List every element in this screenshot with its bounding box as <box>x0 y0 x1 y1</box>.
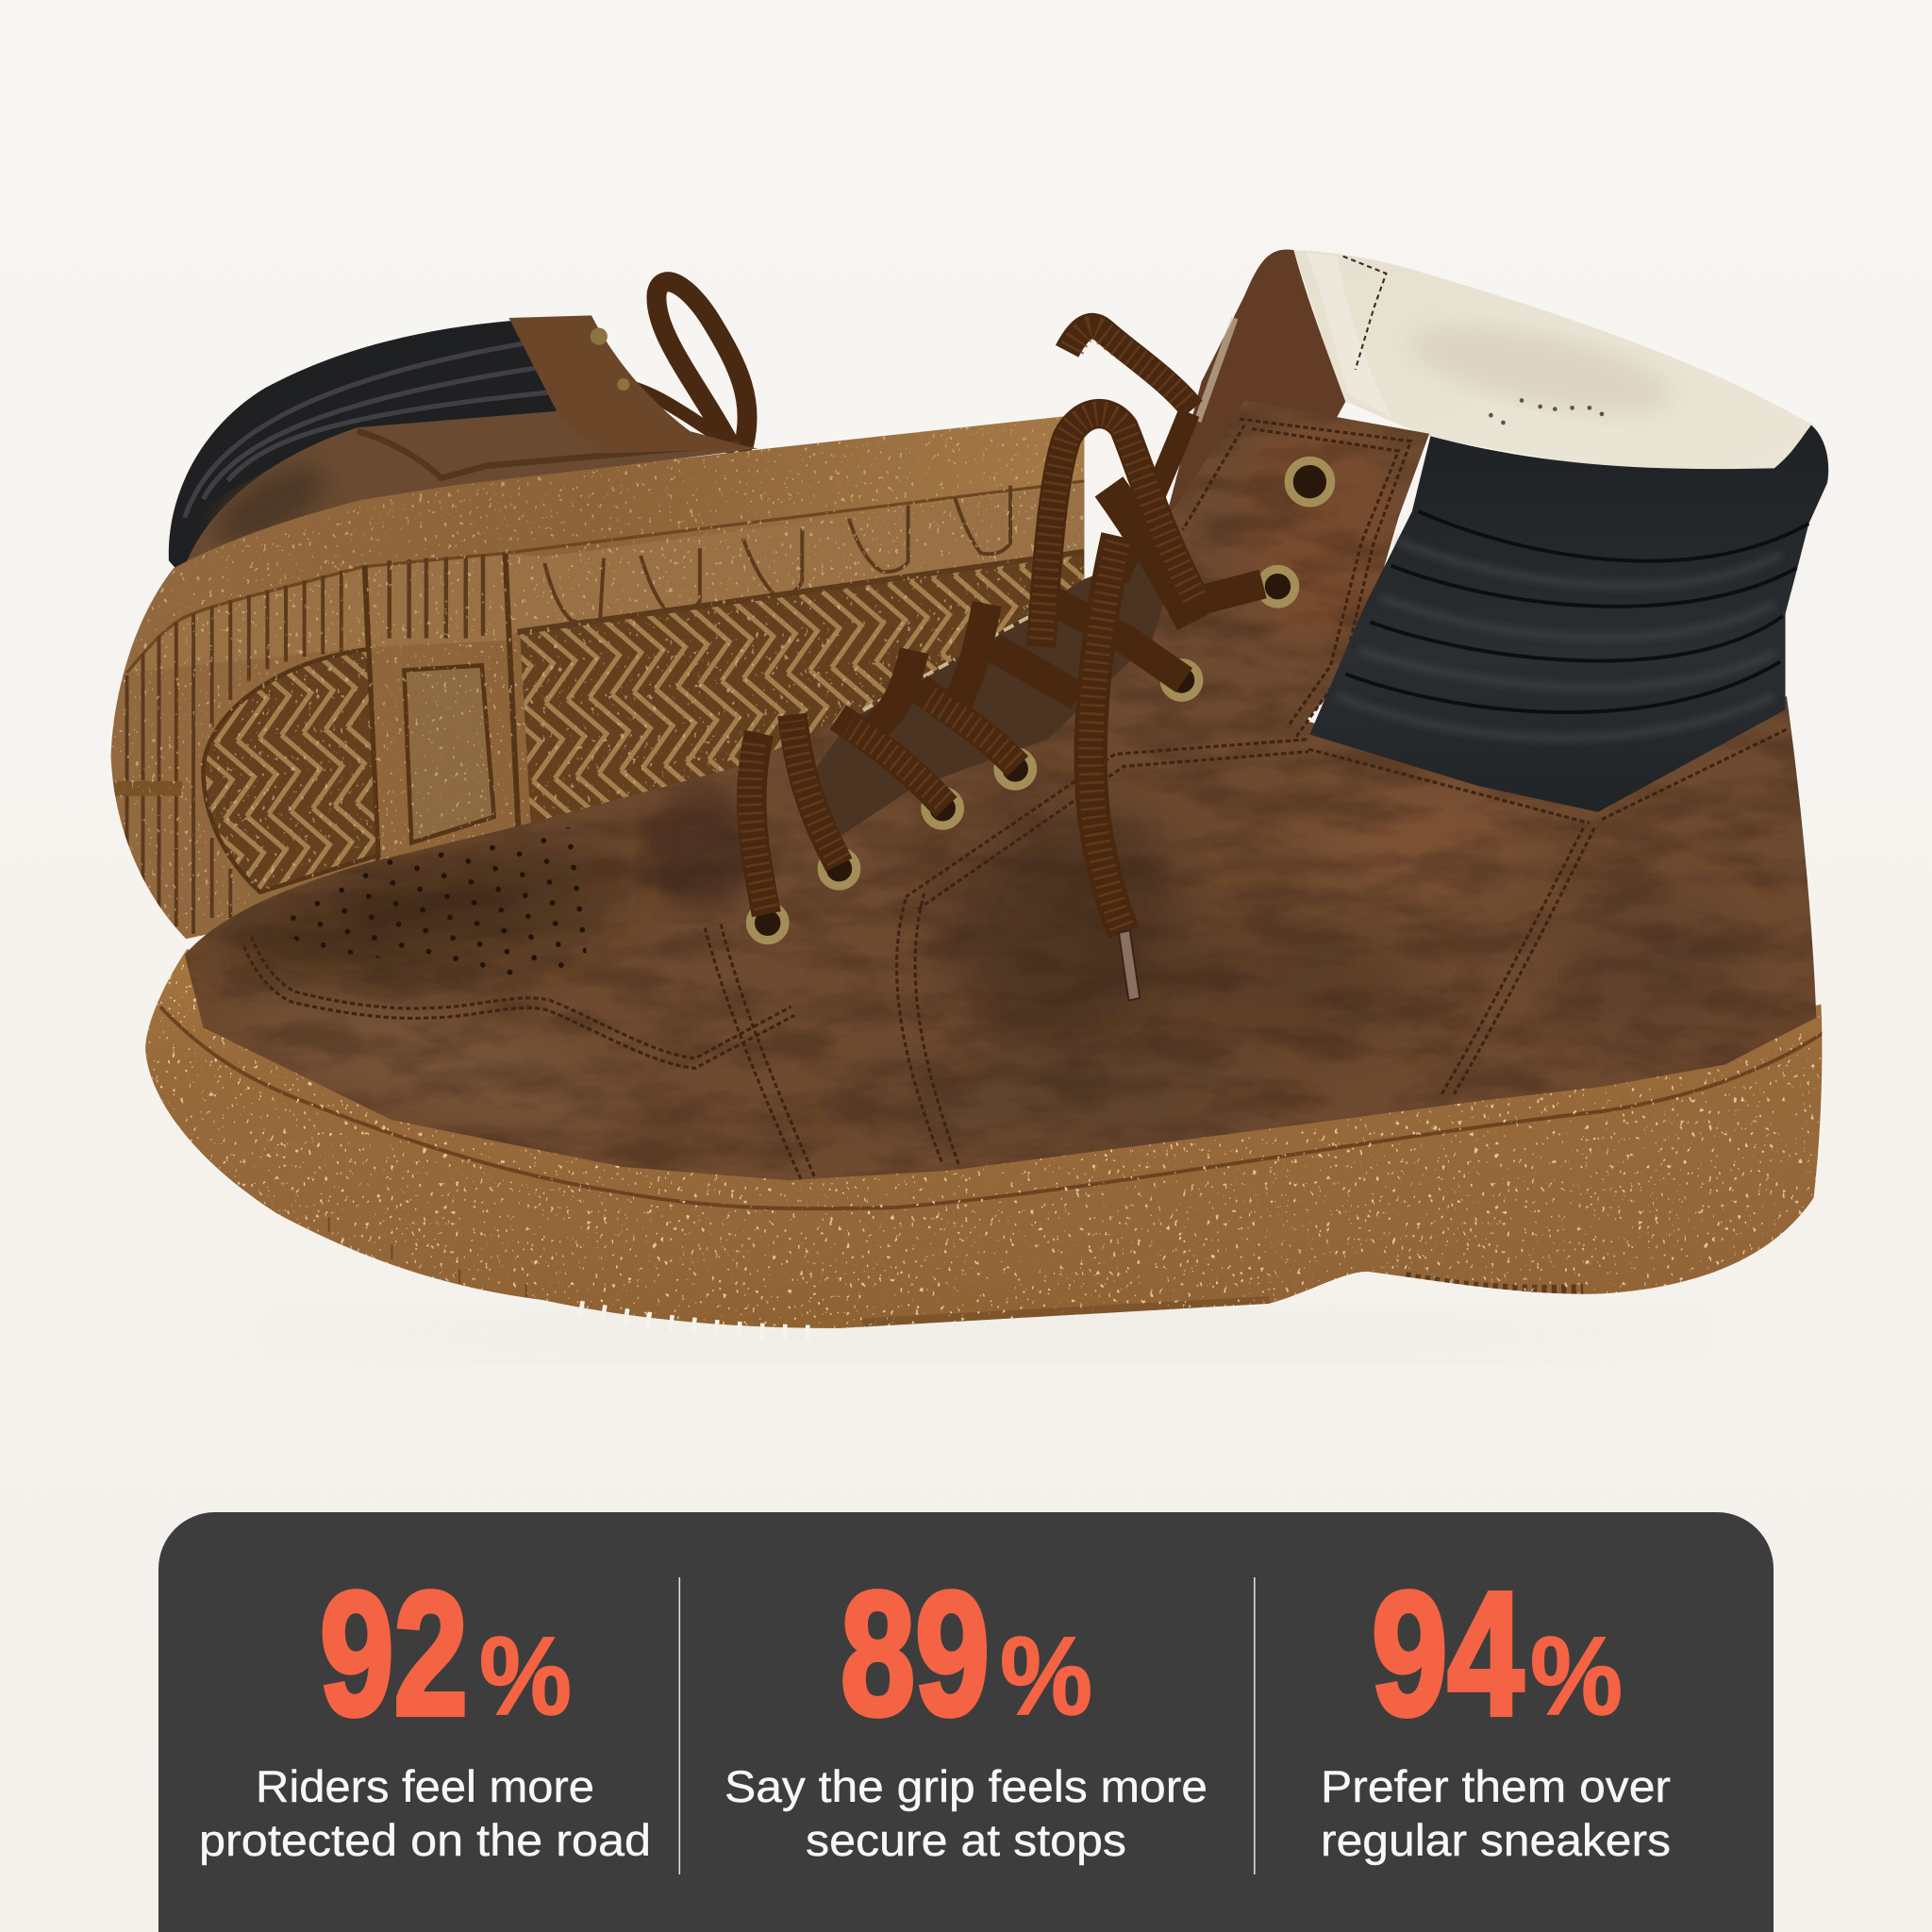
forefoot zigzag <box>520 555 1084 850</box>
ribbed heel band <box>127 571 341 934</box>
column divider left <box>679 1577 680 1874</box>
stat: 89 percent grip: % <box>1000 1614 1092 1739</box>
sole speckles <box>98 407 1096 949</box>
back boot seen from its sole <box>98 282 1109 949</box>
midfoot panel <box>404 665 494 842</box>
stat: 92 percent protected: protected on the road <box>199 1815 651 1865</box>
back sole tread <box>98 407 1109 949</box>
panel background <box>158 1512 1774 1932</box>
heel zigzag <box>203 649 378 892</box>
column divider right <box>1254 1577 1256 1874</box>
sole rim groove <box>160 1007 1824 1208</box>
stat: 94 percent prefer <box>1321 1557 1671 1865</box>
stat: 92 percent protected: 92 <box>320 1557 468 1752</box>
stat: 94 percent prefer: regular sneakers <box>1321 1815 1671 1865</box>
stat: 92 percent protected <box>199 1557 651 1865</box>
front boot tongue <box>1164 250 1345 524</box>
lug band <box>127 480 1109 673</box>
stat: 92 percent protected: % <box>479 1614 572 1739</box>
toe tread notches <box>329 1217 526 1297</box>
stat: 92 percent protected: Riders feel more <box>256 1761 594 1811</box>
tongue mesh behind the laces <box>801 542 1183 838</box>
toe perforations <box>291 826 587 975</box>
back boot black padded collar <box>169 321 579 579</box>
stat: 94 percent prefer: Prefer them over <box>1321 1761 1671 1811</box>
brass eyelets <box>750 460 1331 941</box>
stat: 94 percent prefer: 94 <box>1372 1557 1524 1752</box>
front boot speckled gum sole <box>124 949 1836 1343</box>
back boot tongue tab <box>508 315 754 454</box>
black padded ankle collar <box>1309 425 1828 812</box>
stat: 94 percent prefer: % <box>1530 1614 1623 1739</box>
back sole body <box>111 415 1084 939</box>
stat: 89 percent grip: secure at stops <box>806 1815 1126 1865</box>
stat: 89 percent grip: Say the grip feels more <box>724 1761 1208 1811</box>
stat: 89 percent grip: 89 <box>841 1557 990 1752</box>
product photo: two brown leather boots <box>111 249 1828 1328</box>
front sole tread strip <box>1405 1281 1583 1294</box>
back boot upper leather <box>182 410 758 579</box>
metal lace tip <box>1119 930 1140 1001</box>
upper seams <box>244 419 1787 1179</box>
lace weave highlights <box>750 328 1196 933</box>
front boot laces <box>752 326 1263 933</box>
front boot in profile <box>124 250 1836 1343</box>
front boot inner lining <box>1293 250 1814 471</box>
front boot brown upper <box>160 394 1824 1195</box>
back boot lace loop <box>616 282 747 443</box>
floor shadow <box>246 1319 1725 1348</box>
stat: 89 percent grip <box>724 1557 1208 1865</box>
